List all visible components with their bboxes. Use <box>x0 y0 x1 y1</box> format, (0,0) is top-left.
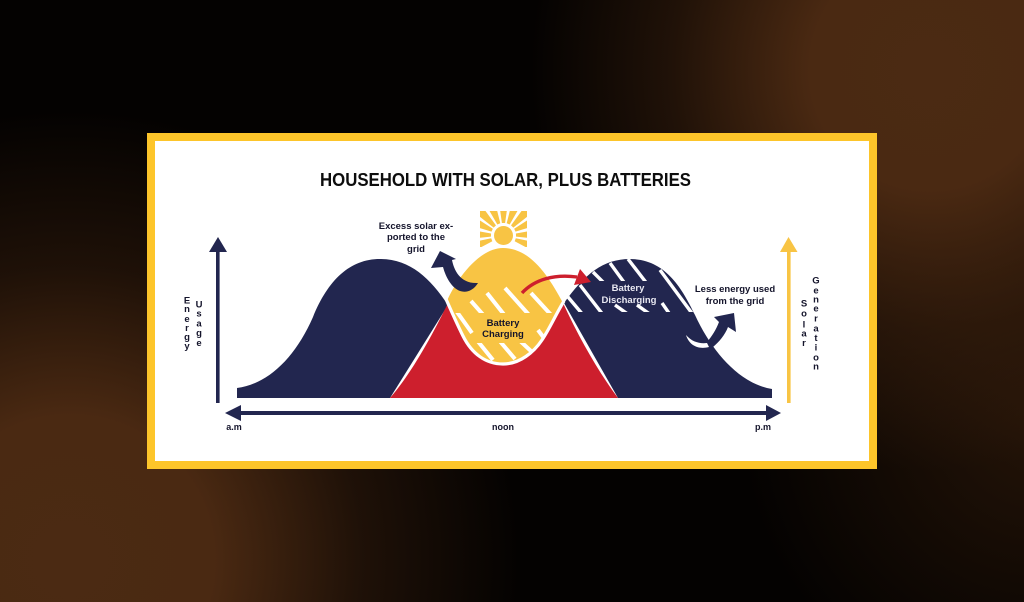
icon: sun <box>480 211 527 247</box>
hatching: battery discharging <box>568 259 694 316</box>
label: battery charging: Battery <box>487 318 520 329</box>
title: HOUSEHOLD WITH SOLAR, PLUS BATTERIES <box>320 170 691 190</box>
arrow: charge to discharge <box>522 269 591 293</box>
label: a.m: a.m <box>226 422 242 432</box>
chart: daily energy curves <box>237 248 772 398</box>
label: noon: noon <box>492 422 514 432</box>
label: p.m: p.m <box>755 422 771 432</box>
arrow: solar generation axis <box>780 237 798 403</box>
panel: chart card <box>151 137 873 465</box>
arrow: less energy from grid <box>686 313 736 348</box>
label: battery discharging: Discharging <box>602 295 657 306</box>
label: excess solar exported: Excess solar ex- <box>379 221 453 232</box>
label: energy usage: Energy <box>184 296 190 352</box>
arrow: time axis <box>225 405 781 421</box>
navy usage curve, evening <box>564 259 772 398</box>
arrow: excess solar exported <box>431 251 478 292</box>
yellow solar generation hump <box>447 248 563 364</box>
label: energy usage: Usage <box>196 300 203 349</box>
label: less energy used: Less energy used <box>695 284 775 295</box>
label: excess solar exported: grid <box>407 244 425 255</box>
hatching: battery charging <box>457 288 553 360</box>
label: solar generation: Solar <box>801 298 807 349</box>
label: excess solar exported: ported to the <box>387 232 445 243</box>
label: solar generation: Generation <box>812 276 820 372</box>
label: battery discharging: Battery <box>612 283 645 294</box>
white valley outline <box>446 299 564 364</box>
navy usage curve, morning <box>237 259 448 398</box>
red grid usage area <box>390 303 618 398</box>
label: less energy used: from the grid <box>706 296 764 307</box>
label: battery charging: Charging <box>482 329 524 340</box>
label: energy usage <box>184 296 203 352</box>
arrow: energy usage axis <box>209 237 227 403</box>
label: solar generation <box>801 276 820 372</box>
